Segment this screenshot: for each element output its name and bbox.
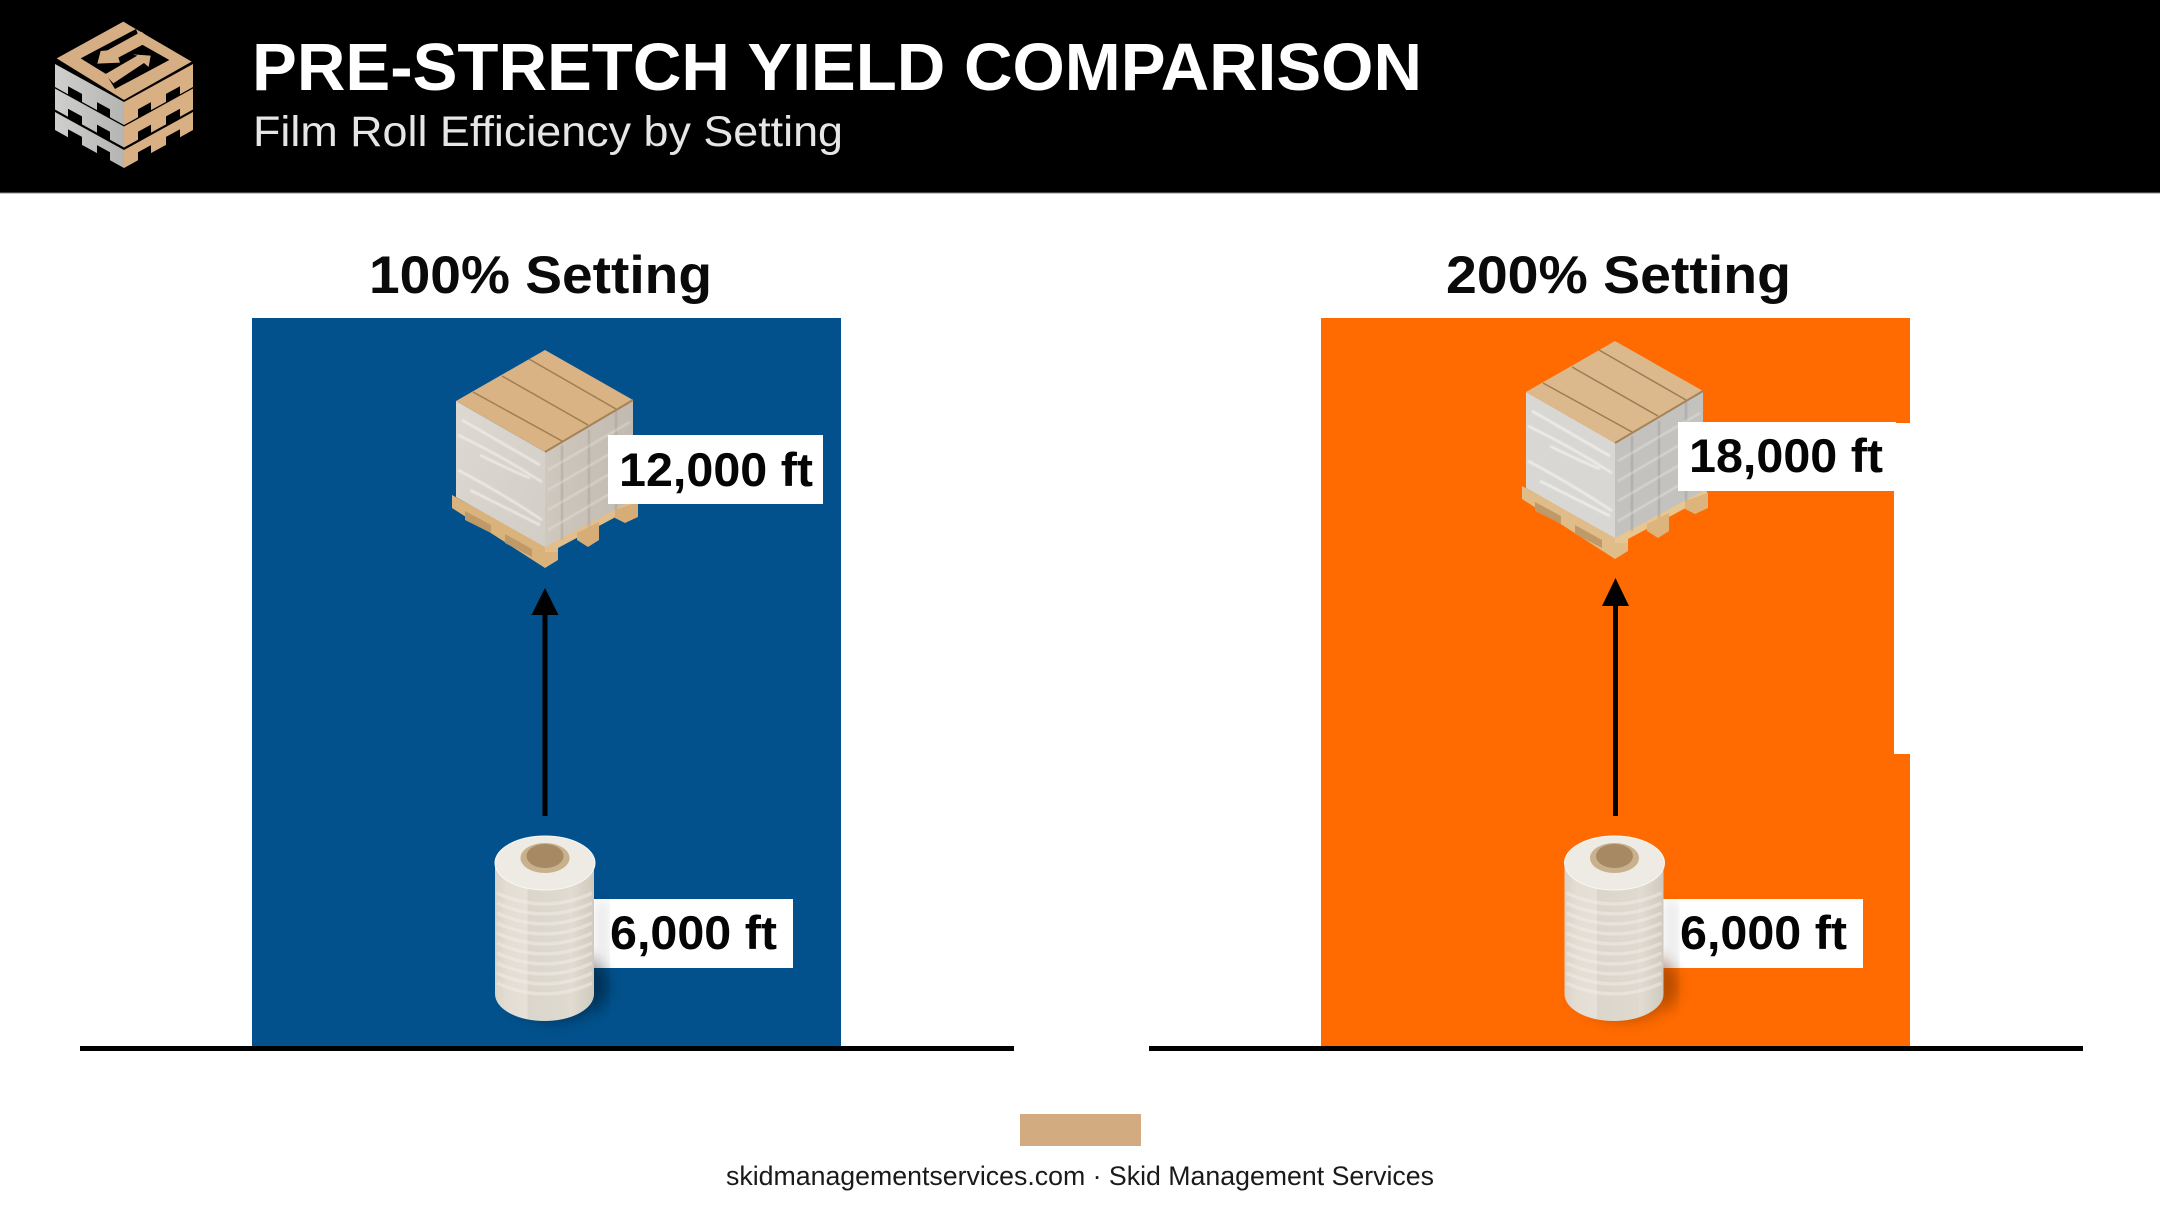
film roll illustration xyxy=(1564,836,1678,1021)
label: 18,000 ft xyxy=(1678,422,1896,491)
footer accent swatch xyxy=(1020,1114,1141,1146)
pallet illustration xyxy=(1522,341,1708,559)
header bar xyxy=(0,0,2160,194)
footer text: skidmanagementservices.com · Skid Management Services xyxy=(726,1161,1434,1191)
label: 6,000 ft: 6,000 ft xyxy=(1680,906,1847,959)
baseline: left xyxy=(80,1046,1014,1051)
subtitle: Film Roll Efficiency by Setting xyxy=(253,108,843,156)
panel: 100% setting xyxy=(252,246,841,1048)
arrow: roll to pallet xyxy=(1602,578,1629,816)
heading: 200% setting: 200% Setting xyxy=(1446,246,1791,305)
title: PRE-STRETCH YIELD COMPARISON xyxy=(252,30,1422,105)
label: 6,000 ft xyxy=(590,899,793,968)
label: 6,000 ft xyxy=(1660,899,1863,968)
baseline: right xyxy=(1149,1046,2083,1051)
white notch on orange column xyxy=(1894,423,1911,754)
film roll illustration xyxy=(495,836,608,1021)
logo: stacked pallet cube xyxy=(55,22,193,168)
label: 12,000 ft: 12,000 ft xyxy=(619,443,813,496)
panel: 200% setting xyxy=(1321,246,1911,1048)
heading: 100% setting: 100% Setting xyxy=(369,246,712,305)
label: 18,000 ft: 18,000 ft xyxy=(1689,429,1883,482)
pallet illustration xyxy=(452,350,638,568)
label: 6,000 ft: 6,000 ft xyxy=(610,906,777,959)
label: 12,000 ft xyxy=(608,435,823,504)
arrow: roll to pallet xyxy=(532,588,558,816)
orange column xyxy=(1321,318,1910,1048)
blue column xyxy=(252,318,841,1048)
